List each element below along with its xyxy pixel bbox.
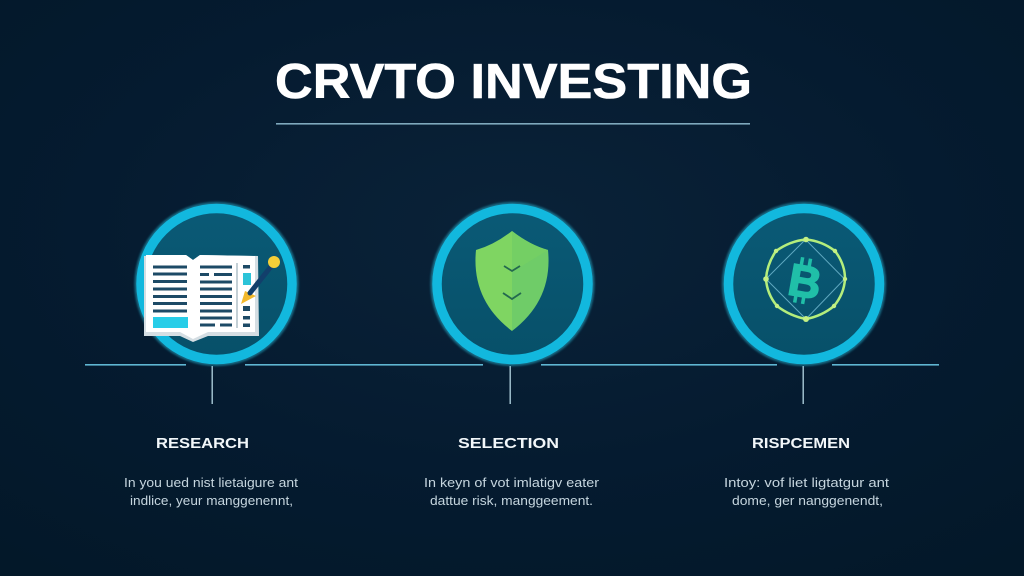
icon: open book [144, 255, 259, 342]
connector: risk [802, 366, 804, 404]
bitcoin symbol: B [785, 254, 825, 309]
panel: risk [724, 204, 890, 508]
text: risk: Intoy: vof liet ligtatgur ant [724, 476, 890, 490]
icon: shield [475, 231, 549, 331]
heading: research: RESEARCH [156, 435, 249, 452]
timeline [85, 364, 939, 366]
icon: pencil [241, 256, 280, 304]
connector: selection [510, 366, 511, 404]
text: research: indlice, yeur manggenennt, [130, 494, 293, 508]
text: selection: dattue risk, manggeement. [430, 494, 593, 508]
panel: research [124, 204, 299, 508]
title: CRVTO INVESTING [275, 55, 752, 109]
icon: bitcoin network [763, 237, 847, 322]
icon ring: research [136, 204, 297, 364]
icon ring: selection [432, 204, 593, 364]
heading: selection: SELECTION [458, 435, 559, 452]
heading: risk: RISPCEMEN [752, 435, 850, 452]
connector: research [212, 366, 213, 404]
text: selection [424, 476, 599, 508]
panel: selection [424, 204, 599, 508]
icon ring: risk [724, 204, 884, 364]
text: risk [724, 476, 890, 508]
text: research: In you ued nist lietaigure ant [124, 476, 299, 490]
text: selection: In keyn of vot imlatigv eater [424, 476, 599, 490]
text: risk: dome, ger nanggenendt, [732, 494, 883, 508]
title underline [276, 123, 750, 125]
text: research [124, 476, 299, 508]
